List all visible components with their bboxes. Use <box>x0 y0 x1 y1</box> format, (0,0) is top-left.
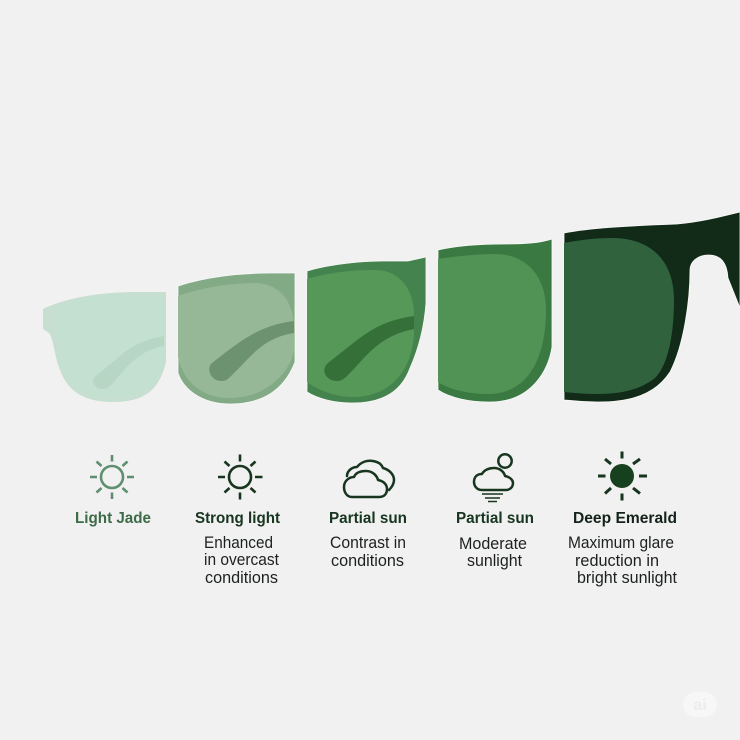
description: maximum glare reduction: bright sunlight <box>577 569 677 587</box>
description: enhanced in overcast conditions: Enhanced <box>204 534 273 552</box>
column 5: deep emerald <box>568 452 677 587</box>
description: maximum glare reduction <box>568 534 677 587</box>
lens 1: light jade <box>43 292 166 402</box>
heading: Deep Emerald: Deep Emerald <box>573 510 677 527</box>
heading: Partial sun: Partial sun <box>456 510 534 527</box>
description: moderate sunlight <box>459 535 527 570</box>
column 1: light jade <box>75 455 151 527</box>
icon: filled sun <box>598 452 647 500</box>
icon: double cloud <box>344 461 394 497</box>
column 3: partial sun contrast <box>329 461 407 570</box>
heading: Light Jade: Light Jade <box>75 510 151 527</box>
description: enhanced in overcast conditions <box>204 534 279 587</box>
description: enhanced in overcast conditions: in overcast <box>204 551 279 569</box>
lens 2: strong light <box>178 273 295 404</box>
badge: ai watermark <box>683 692 717 717</box>
column 2: strong light <box>195 454 281 587</box>
lens 3 temple arm <box>324 316 414 381</box>
badge: ai watermark: ai <box>693 697 707 714</box>
description: contrast in conditions <box>330 534 406 570</box>
icon: outlined sun light <box>90 455 134 499</box>
description: moderate sunlight: Moderate <box>459 535 527 553</box>
lens 4: partial sun, moderate <box>438 239 552 402</box>
lens 5: deep emerald with bridge <box>564 212 740 402</box>
column 4: partial sun moderate <box>456 454 534 570</box>
description: moderate sunlight: sunlight <box>467 552 522 570</box>
lens 3: partial sun, contrast <box>307 257 426 403</box>
heading: Strong light: Strong light <box>195 510 281 527</box>
icon: outlined sun dark <box>218 454 262 500</box>
lens 1 temple arm <box>93 336 164 389</box>
description: maximum glare reduction: reduction in <box>575 552 659 570</box>
description: contrast in conditions: Contrast in <box>330 534 406 552</box>
description: contrast in conditions: conditions <box>331 552 404 570</box>
heading: Partial sun: Partial sun <box>329 510 407 527</box>
description: enhanced in overcast conditions: conditions <box>205 569 278 587</box>
lens 2 temple arm <box>209 321 294 381</box>
description: maximum glare reduction: Maximum glare <box>568 534 674 552</box>
icon: cloud with sun and haze <box>474 454 513 502</box>
